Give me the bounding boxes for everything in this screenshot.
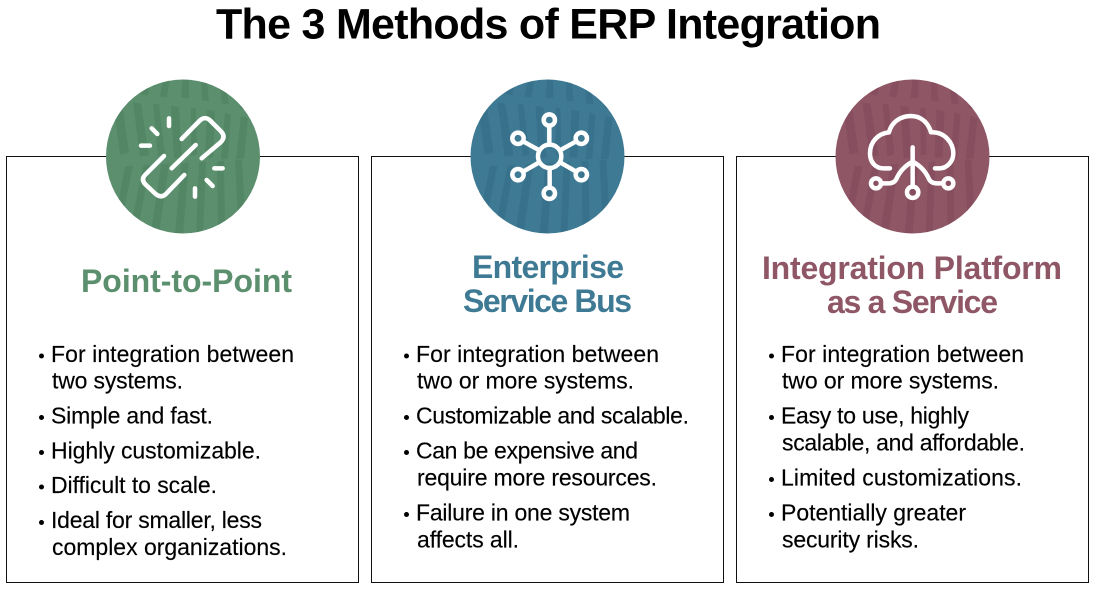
bullet list: Failure in one system: [416, 500, 630, 526]
panel border: [372, 156, 724, 582]
bullet list: security risks.: [782, 526, 919, 552]
panel: Integration Platform as a Service: [736, 78, 1088, 582]
heading: Point-to-Point: [81, 263, 292, 299]
bullet list: Customizable and scalable.: [416, 402, 689, 428]
bullet list: Difficult to scale.: [51, 472, 217, 498]
bullet list: For integration between: [416, 341, 659, 367]
bullet list: [39, 341, 294, 560]
panel: Enterprise Service Bus: [372, 78, 724, 582]
heading: Service Bus: [463, 283, 632, 319]
bullet list: Highly customizable.: [51, 438, 261, 464]
heading: Enterprise: [472, 249, 624, 285]
bullet list: Easy to use, highly: [781, 402, 970, 428]
bullet list: For integration between: [781, 341, 1024, 367]
bullet list: [404, 341, 689, 552]
panel border: [736, 156, 1088, 582]
bullet list: two systems.: [52, 368, 183, 394]
bullet list: Potentially greater: [781, 500, 966, 526]
icon: cloud with connections: [836, 78, 990, 234]
bullet list: scalable, and affordable.: [782, 430, 1025, 456]
panel: Point-to-Point: [6, 78, 358, 582]
heading: as a Service: [827, 284, 998, 320]
heading: [463, 249, 632, 319]
bullet list: Limited customizations.: [781, 464, 1022, 490]
panel border: [6, 156, 358, 582]
title: The 3 Methods of ERP Integration: [216, 0, 881, 48]
icon: broken chain link: [106, 78, 260, 234]
bullet list: Simple and fast.: [51, 402, 213, 428]
bullet list: require more resources.: [417, 464, 657, 490]
bullet list: [769, 341, 1025, 552]
bullet list: two or more systems.: [782, 368, 999, 394]
bullet list: Ideal for smaller, less: [51, 507, 262, 533]
heading: [762, 250, 1062, 320]
bullet list: complex organizations.: [52, 534, 287, 560]
bullet list: affects all.: [417, 526, 519, 552]
icon: hub and spokes: [470, 78, 624, 234]
bullet list: Can be expensive and: [416, 438, 638, 464]
heading: Integration Platform: [762, 250, 1062, 286]
bullet list: For integration between: [51, 341, 294, 367]
bullet list: two or more systems.: [417, 368, 634, 394]
